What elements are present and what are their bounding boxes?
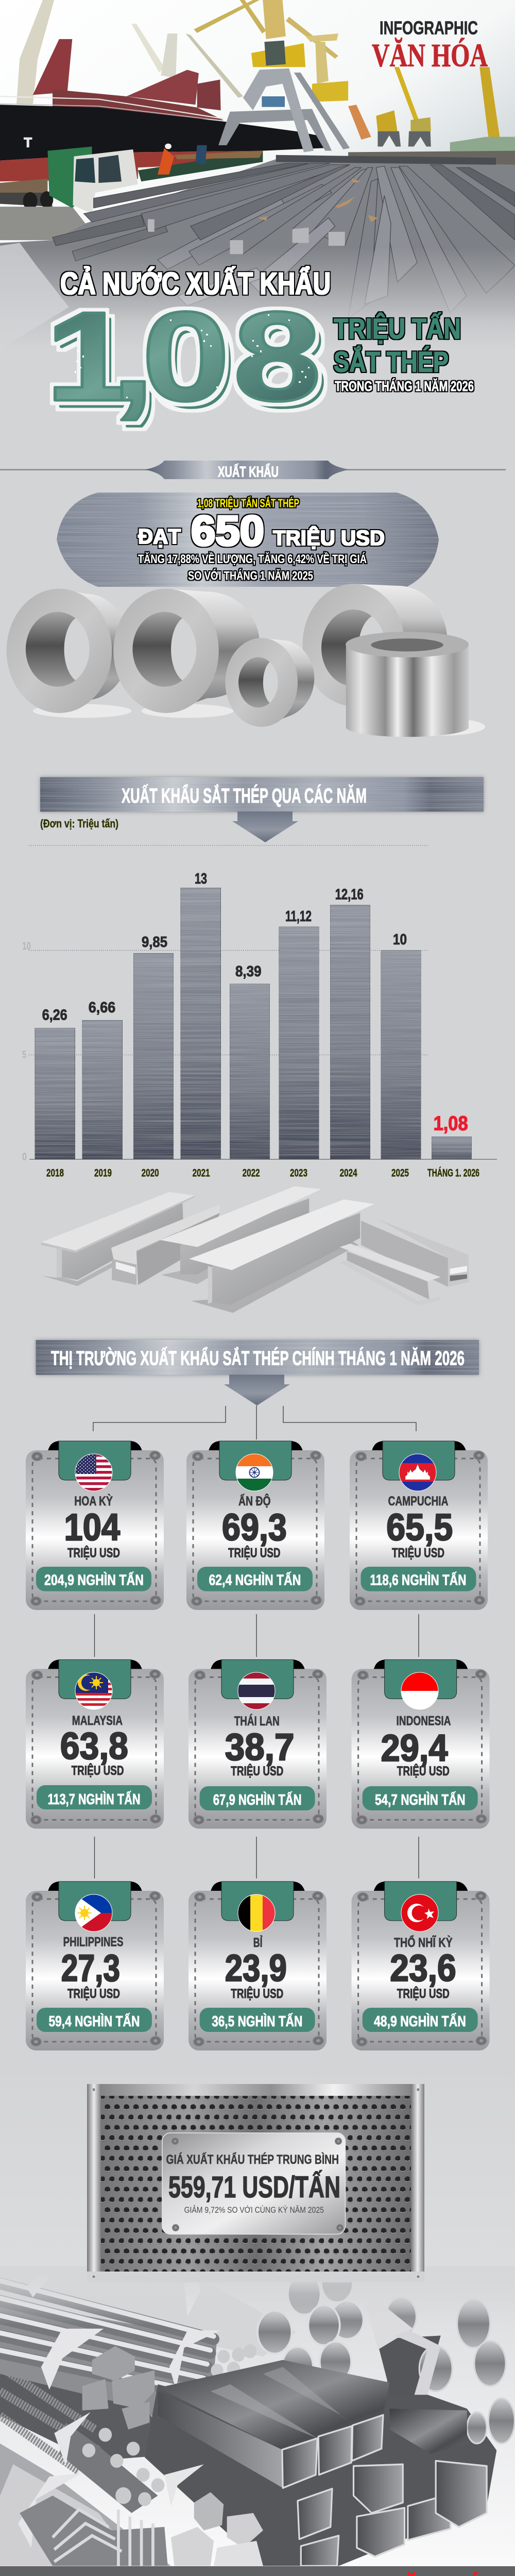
card: Indonesia: 29,4 <box>381 1727 448 1769</box>
card: Philippines: 27,3 <box>61 1947 120 1989</box>
card: Thái Lan <box>188 1659 327 1828</box>
year labels: 2025 <box>391 1167 409 1179</box>
card: Campuchia: TRIỆU USD <box>392 1545 444 1560</box>
card: Hoa Kỳ: HOA KỲ <box>74 1493 113 1509</box>
card: Indonesia: TRIỆU USD <box>397 1763 450 1778</box>
card: Thổ Nhĩ Kỳ: 23,6 <box>390 1947 456 1989</box>
year labels <box>46 1167 479 1179</box>
arrow: down to chart <box>232 811 298 842</box>
card: Hoa Kỳ: 204,9 NGHÌN TẤN <box>44 1571 144 1589</box>
panel: export value pill: TĂNG 17,88% VỀ LƯỢNG, TĂNG 6,42% VỀ TRỊ GIÁ <box>138 552 367 566</box>
card: Malaysia: 63,8 <box>60 1725 128 1767</box>
panel: export value pill: ĐẠT <box>138 524 181 548</box>
card: Hoa Kỳ: 104 <box>64 1506 120 1548</box>
year labels: 2019 <box>94 1167 112 1179</box>
small plate: GIẢM 9,72% SO VỚI CÙNG KỲ NĂM 2025 <box>184 2205 324 2215</box>
flag: Indonesia <box>401 1672 438 1709</box>
card: Malaysia: MALAYSIA <box>72 1714 123 1728</box>
year labels: 2020 <box>142 1167 159 1179</box>
value labels: 10 <box>393 931 407 948</box>
panel: export value pill: SO VỚI THÁNG 1 NĂM 2025 <box>188 569 313 583</box>
headline: triệu tấn sắt thép <box>334 312 474 394</box>
card: Ấn Độ: ẤN ĐỘ <box>238 1493 271 1509</box>
card: Campuchia: 118,6 NGHÌN TẤN <box>370 1571 466 1589</box>
flag: United States <box>75 1454 112 1491</box>
card: Indonesia: 54,7 NGHÌN TẤN <box>375 1791 466 1808</box>
flag: Turkey <box>401 1894 438 1931</box>
year labels: THÁNG 1. 2026 <box>427 1167 479 1179</box>
unit note: (Đơn vị: Triệu tấn) <box>40 817 118 830</box>
flag: Malaysia <box>75 1672 112 1709</box>
card: Thái Lan: THÁI LAN <box>234 1714 280 1728</box>
bar chart: steel exports by year <box>22 845 497 1179</box>
card: Malaysia: 113,7 NGHÌN TẤN <box>48 1790 141 1808</box>
value labels: 8,39 <box>235 963 262 980</box>
logo: Infographic Văn Hóa: INFOGRAPHIC <box>380 18 478 39</box>
card: Indonesia: INDONESIA <box>397 1714 451 1728</box>
section banner: xuất khẩu: XUẤT KHẨU <box>218 463 279 480</box>
small plate: GIÁ XUẤT KHẨU THÉP TRUNG BÌNH <box>166 2152 339 2167</box>
hero fade into page background <box>0 247 515 350</box>
small plate <box>162 2133 345 2234</box>
section banner: xuất khẩu <box>0 461 506 480</box>
card: Bỉ: 23,9 <box>225 1947 287 1989</box>
flag: Belgium <box>238 1894 275 1931</box>
card: Ấn Độ <box>186 1441 324 1610</box>
hero photo: port with steel billets <box>0 0 515 349</box>
card: Thái Lan: 38,7 <box>225 1726 295 1768</box>
value labels: 6,26 <box>42 1007 67 1023</box>
hero base fill below fade <box>0 350 515 438</box>
card: Bỉ: BỈ <box>253 1935 263 1950</box>
section header: thị trường xuất khẩu <box>36 1340 479 1405</box>
logo: Infographic Văn Hóa <box>372 18 488 73</box>
footer bar <box>0 2566 515 2576</box>
value labels: 11,12 <box>285 908 312 925</box>
card: Thổ Nhĩ Kỳ: 48,9 NGHÌN TẤN <box>374 2012 466 2030</box>
year labels: 2018 <box>46 1167 64 1179</box>
card: Philippines: PHILIPPINES <box>63 1935 124 1950</box>
title line: CẢ NƯỚC XUẤT KHẨU <box>60 266 331 301</box>
panel: export value pill: TRIỆU USD <box>273 526 385 550</box>
big number 1,08: 1,08 <box>45 285 321 428</box>
value labels <box>42 871 468 1135</box>
card: Thổ Nhĩ Kỳ: THỔ NHĨ KỲ <box>394 1935 453 1950</box>
card: Thái Lan: TRIỆU USD <box>231 1763 283 1778</box>
card: Ấn Độ: TRIỆU USD <box>228 1545 280 1560</box>
speckles on big number <box>75 314 310 404</box>
value labels: 12,16 <box>335 886 364 903</box>
panel: export value pill: 650 <box>191 507 264 554</box>
small plate: 559,71 USD/TẤN <box>168 2171 340 2204</box>
card: Philippines <box>26 1882 164 2050</box>
y axis labels <box>22 940 31 1163</box>
section header: xuất khẩu sắt thép qua các năm <box>40 777 484 842</box>
card: Philippines: TRIỆU USD <box>67 1986 120 2001</box>
card: Thổ Nhĩ Kỳ: TRIỆU USD <box>397 1986 450 2001</box>
card: Ấn Độ: 69,3 <box>222 1506 287 1548</box>
value labels: 1,08 <box>434 1113 468 1135</box>
card: Indonesia <box>352 1659 490 1828</box>
card: Campuchia: CAMPUCHIA <box>388 1494 448 1509</box>
value labels: 13 <box>195 871 207 887</box>
headline: triệu tấn sắt thép: TRIỆU TẤN <box>334 312 461 345</box>
card: Hoa Kỳ: TRIỆU USD <box>67 1545 120 1560</box>
value labels: 6,66 <box>89 999 115 1016</box>
card: Philippines: 59,4 NGHÌN TẤN <box>48 2012 140 2030</box>
y axis labels: 10 <box>22 940 31 952</box>
card: Bỉ: 36,5 NGHÌN TẤN <box>212 2012 302 2030</box>
illustration: I-beams <box>41 1187 469 1313</box>
connector lines <box>93 1405 419 1878</box>
card: Thổ Nhĩ Kỳ <box>352 1882 490 2050</box>
metal plate: average export price <box>87 2084 424 2282</box>
flag: India <box>236 1454 273 1491</box>
year labels: 2022 <box>243 1167 260 1179</box>
bottom background gradient <box>0 2061 515 2568</box>
panel: export value pill <box>57 493 439 587</box>
card: Campuchia <box>350 1441 488 1610</box>
year labels: 2021 <box>193 1167 210 1179</box>
illustration: steel coils <box>7 584 485 737</box>
card: Campuchia: 65,5 <box>386 1506 453 1548</box>
bars <box>35 888 472 1159</box>
card: Malaysia <box>26 1659 164 1828</box>
card: Bỉ <box>188 1882 327 2050</box>
card: Hoa Kỳ <box>26 1441 164 1610</box>
flag: Cambodia <box>399 1454 436 1491</box>
headline: triệu tấn sắt thép: SẮT THÉP <box>334 345 449 378</box>
y axis labels: 0 <box>22 1151 27 1163</box>
panel: export value pill: 1,08 TRIỆU TẤN SẮT THÉP <box>197 496 299 510</box>
card: Thái Lan: 67,9 NGHÌN TẤN <box>213 1791 302 1808</box>
value labels: 9,85 <box>142 934 167 951</box>
card: Bỉ: TRIỆU USD <box>231 1986 283 2001</box>
header text: XUẤT KHẨU SẮT THÉP QUA CÁC NĂM <box>122 783 367 807</box>
year labels: 2023 <box>290 1167 307 1179</box>
illustration: pile of steel products <box>0 2264 515 2566</box>
flag: Thailand <box>238 1672 275 1709</box>
card: Malaysia: TRIỆU USD <box>72 1762 124 1778</box>
y axis labels: 5 <box>22 1049 26 1061</box>
card: Ấn Độ: 62,4 NGHÌN TẤN <box>209 1571 301 1589</box>
arrow: down to markets <box>224 1375 290 1405</box>
flag: Philippines <box>75 1894 112 1931</box>
year labels: 2024 <box>340 1167 357 1179</box>
